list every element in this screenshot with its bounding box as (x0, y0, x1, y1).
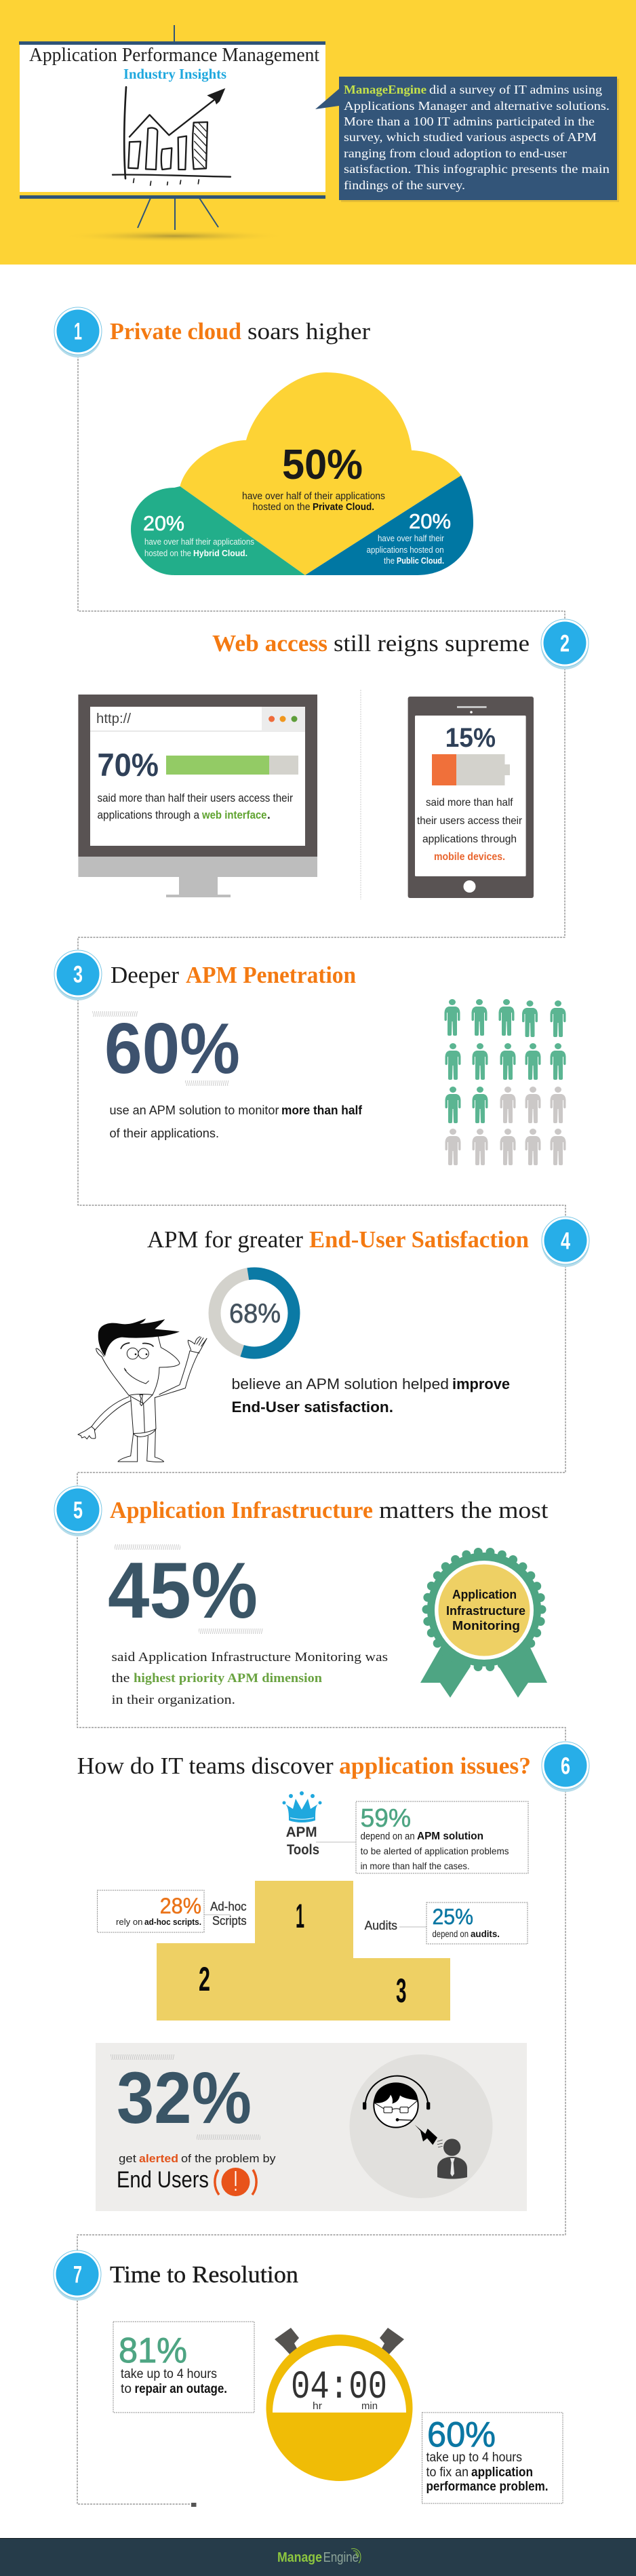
end users caption: get (119, 2152, 136, 2165)
callout: 81 percent: repair an outage. (134, 2382, 227, 2396)
icon: cartoon man waving (78, 1319, 207, 1462)
intro callout: did a survey of IT admins using (429, 83, 602, 96)
icon: award ribbon: Monitoring (452, 1619, 520, 1633)
monitor (78, 695, 317, 897)
callout: 28 percent: 28% (160, 1894, 201, 1918)
stat: private 50 percent: 50% (282, 442, 363, 488)
heading 3: APM Penetration (186, 962, 356, 988)
heading 6 (77, 1753, 531, 1779)
heading 4: End-User Satisfaction (309, 1226, 529, 1253)
heading 2 (212, 630, 530, 657)
chart: donut 68 percent (209, 1268, 300, 1359)
infrastructure caption (111, 1650, 388, 1707)
connector end marker (191, 2503, 197, 2507)
icon: stopwatch (266, 2328, 412, 2481)
callout: 81 percent: 81% (119, 2331, 187, 2370)
callout: 59 percent: in more than half the cases. (361, 1860, 470, 1871)
title: Application Performance Management (29, 45, 319, 66)
callout: 60 percent: application (471, 2465, 533, 2480)
callout: 59 percent: depend on an (361, 1831, 415, 1842)
callout: 60 percent: to fix an (426, 2465, 469, 2480)
chart: podium: 1 (296, 1897, 304, 1935)
panel: section 5 application infrastructure (54, 1486, 549, 1707)
icon: crown (282, 1791, 321, 1822)
heading 5: Application Infrastructure (110, 1497, 373, 1523)
icon: sketched rising chart (113, 87, 231, 185)
chart: donut 68 percent: 68% (229, 1299, 281, 1329)
monitor caption: applications through a (98, 808, 199, 821)
stat: public 20 percent: 20% (409, 509, 451, 533)
intro callout (315, 77, 619, 202)
heading 5 (110, 1497, 549, 1523)
stat: private 50 percent: have over half of their applications (242, 490, 385, 502)
badge 5 (54, 1486, 102, 1536)
callout: 28 percent: rely on (116, 1917, 142, 1927)
monitor: http:// (96, 711, 131, 726)
phone caption: said more than half (426, 797, 513, 808)
callout: 81 percent (113, 2322, 254, 2413)
callout: 59 percent: to be alerted of application problems (361, 1846, 509, 1856)
monitor caption: . (267, 808, 271, 821)
infrastructure caption: said Application Infrastructure Monitoring was (111, 1650, 388, 1664)
label: Ad-hoc Scripts (210, 1900, 247, 1928)
heading 7: Time to Resolution (110, 2261, 298, 2288)
callout: 60 percent: take up to 4 hours (426, 2451, 522, 2465)
callout: 59 percent (356, 1801, 528, 1873)
badge 6: 6 (561, 1753, 570, 1780)
intro callout: survey, which studied various aspects of APM (344, 130, 597, 144)
dashed connector path (77, 353, 565, 2504)
logo: ManageEngine (277, 2549, 361, 2565)
badge 2: 2 (560, 631, 570, 657)
label: Ad-hoc Scripts: Ad-hoc (210, 1900, 247, 1913)
icon: award ribbon: Infrastructure (446, 1604, 525, 1618)
stat: 45 percent: 45% (108, 1546, 258, 1635)
badge 6 (542, 1742, 589, 1792)
stat: private 50 percent (242, 442, 385, 513)
chart: cloud split (131, 372, 473, 575)
stat: hybrid 20 percent: 20% (143, 511, 184, 535)
infrastructure caption: the (111, 1671, 130, 1685)
badge 1 (54, 307, 102, 357)
satisfaction caption: believe an APM solution helped (232, 1375, 449, 1392)
badge 5: 5 (73, 1498, 83, 1523)
phone caption (417, 797, 523, 863)
stat: 15 percent: 15% (445, 723, 496, 753)
heading 4 (147, 1226, 529, 1253)
stat: 70 percent: 70% (98, 747, 159, 783)
icon: award ribbon (420, 1552, 547, 1698)
intro callout: satisfaction. This infographic presents the main (344, 162, 610, 176)
callout: 25 percent (426, 1902, 528, 1944)
panel: section 4 end-user satisfaction (78, 1217, 589, 1462)
icon: award ribbon: Application (452, 1588, 517, 1601)
intro callout: Applications Manager and alternative solutions. (344, 99, 610, 113)
icon: stopwatch: hr (313, 2400, 322, 2412)
callout: 59 percent: 59% (361, 1804, 411, 1833)
badge 7: 7 (73, 2261, 82, 2288)
stat: hybrid 20 percent: hosted on the (144, 549, 191, 558)
phone (408, 697, 534, 898)
penetration caption (110, 1104, 363, 1140)
end users caption: of the problem by (181, 2152, 276, 2165)
stat: hybrid 20 percent: have over half their applications (144, 537, 254, 547)
callout: 81 percent: take up to 4 hours (121, 2367, 217, 2381)
phone caption: mobile devices. (434, 851, 505, 863)
end users caption (117, 2152, 276, 2193)
label: APM Tools: Tools (287, 1842, 319, 1858)
badge 4: 4 (561, 1228, 570, 1255)
heading 3 (111, 962, 356, 988)
heading 6: How do IT teams discover (77, 1753, 334, 1779)
panel: section 2 web access (78, 619, 589, 899)
callout: 28 percent (98, 1890, 204, 1932)
stat: public 20 percent: applications hosted on (367, 545, 444, 555)
end users caption: alerted (139, 2152, 178, 2165)
infrastructure caption: highest priority APM dimension (134, 1671, 322, 1685)
badge 3: 3 (73, 962, 83, 988)
penetration caption: of their applications. (110, 1127, 219, 1140)
heading 4: APM for greater (147, 1226, 303, 1253)
intro callout: ManageEngine (344, 83, 426, 96)
callout: 59 percent: APM solution (417, 1831, 483, 1842)
stat: public 20 percent: the (384, 556, 395, 566)
logo: ManageEngine: Manage (277, 2550, 322, 2565)
progress bar (166, 756, 298, 775)
penetration caption: use an APM solution to monitor (110, 1104, 279, 1117)
phone caption: their users access their (417, 815, 523, 827)
satisfaction caption (232, 1375, 510, 1416)
stat: private 50 percent: Private Cloud. (313, 501, 374, 513)
panel: section 3 APM penetration (54, 950, 565, 1165)
callout: 25 percent: audits. (471, 1928, 500, 1939)
projector screen illustration (19, 25, 325, 242)
stat: 60 percent: 60% (104, 1009, 240, 1089)
icon: stopwatch: min (361, 2400, 378, 2412)
satisfaction caption: improve (452, 1375, 510, 1392)
callout: 60 percent (422, 2413, 563, 2503)
monitor caption (98, 792, 293, 821)
badge 4 (542, 1217, 589, 1267)
callout: 60 percent: performance problem. (426, 2480, 548, 2494)
icon: alert (215, 2168, 256, 2196)
heading 5: matters the most (379, 1497, 549, 1523)
chart: podium: 3 (396, 1972, 407, 2010)
heading 1: soars higher (247, 318, 370, 345)
callout: 60 percent: 60% (427, 2415, 496, 2455)
chart: podium: 2 (199, 1960, 210, 1998)
subtitle: Industry Insights (123, 66, 226, 82)
phone caption: applications through (422, 834, 517, 845)
battery (432, 754, 510, 785)
stat: public 20 percent: have over half their (378, 534, 444, 543)
stat: public 20 percent (367, 509, 451, 566)
stat: hybrid 20 percent: Hybrid Cloud. (193, 549, 247, 558)
panel: section 1 private cloud (54, 307, 473, 575)
panel: header background (0, 0, 636, 265)
heading 1 (110, 318, 370, 345)
panel: section 6 how IT teams discover issues (77, 1742, 589, 2211)
badge 2 (541, 619, 589, 669)
badge 1: 1 (74, 319, 82, 345)
panel: section 7 time to resolution (54, 2250, 563, 2503)
label: APM Tools (286, 1824, 319, 1858)
icon: stopwatch: 04:00 (291, 2366, 387, 2410)
pictogram: people (445, 999, 565, 1165)
callout: 81 percent: to (121, 2382, 132, 2396)
heading 2: still reigns supreme (334, 630, 530, 657)
penetration caption: more than half (281, 1104, 363, 1117)
monitor caption: said more than half their users access their (98, 792, 293, 804)
callout: 25 percent: 25% (433, 1905, 473, 1929)
footer band (0, 2538, 636, 2576)
panel: end users 32 percent (96, 2043, 527, 2211)
intro callout: findings of the survey. (344, 178, 465, 192)
label: Audits: Audits (365, 1919, 397, 1932)
intro callout: ranging from cloud adoption to end-user (344, 147, 567, 160)
infrastructure caption: in their organization. (111, 1693, 235, 1707)
badge 3 (54, 950, 102, 1000)
heading 1: Private cloud (110, 318, 242, 345)
satisfaction caption: End-User satisfaction. (232, 1399, 393, 1416)
heading 3: Deeper (111, 962, 179, 988)
label: Ad-hoc Scripts: Scripts (212, 1914, 247, 1928)
monitor caption: web interface (201, 808, 267, 821)
end users caption: End Users (117, 2167, 209, 2193)
badge 7 (54, 2250, 101, 2301)
icon: support agent and user (350, 2054, 492, 2198)
stat: private 50 percent: hosted on the (252, 501, 311, 513)
stat: 32 percent: 32% (117, 2056, 252, 2139)
intro callout: More than a 100 IT admins participated in the (344, 115, 595, 128)
heading 2: Web access (212, 630, 327, 657)
logo: ManageEngine: Engine (323, 2550, 359, 2565)
chart: podium (157, 1881, 450, 2021)
stat: hybrid 20 percent (143, 511, 254, 558)
callout: 25 percent: depend on (433, 1928, 469, 1939)
stat: public 20 percent: Public Cloud. (397, 556, 444, 566)
callout: 28 percent: ad-hoc scripts. (144, 1917, 201, 1927)
label: APM Tools: APM (286, 1824, 317, 1840)
heading 6: application issues? (339, 1753, 531, 1779)
